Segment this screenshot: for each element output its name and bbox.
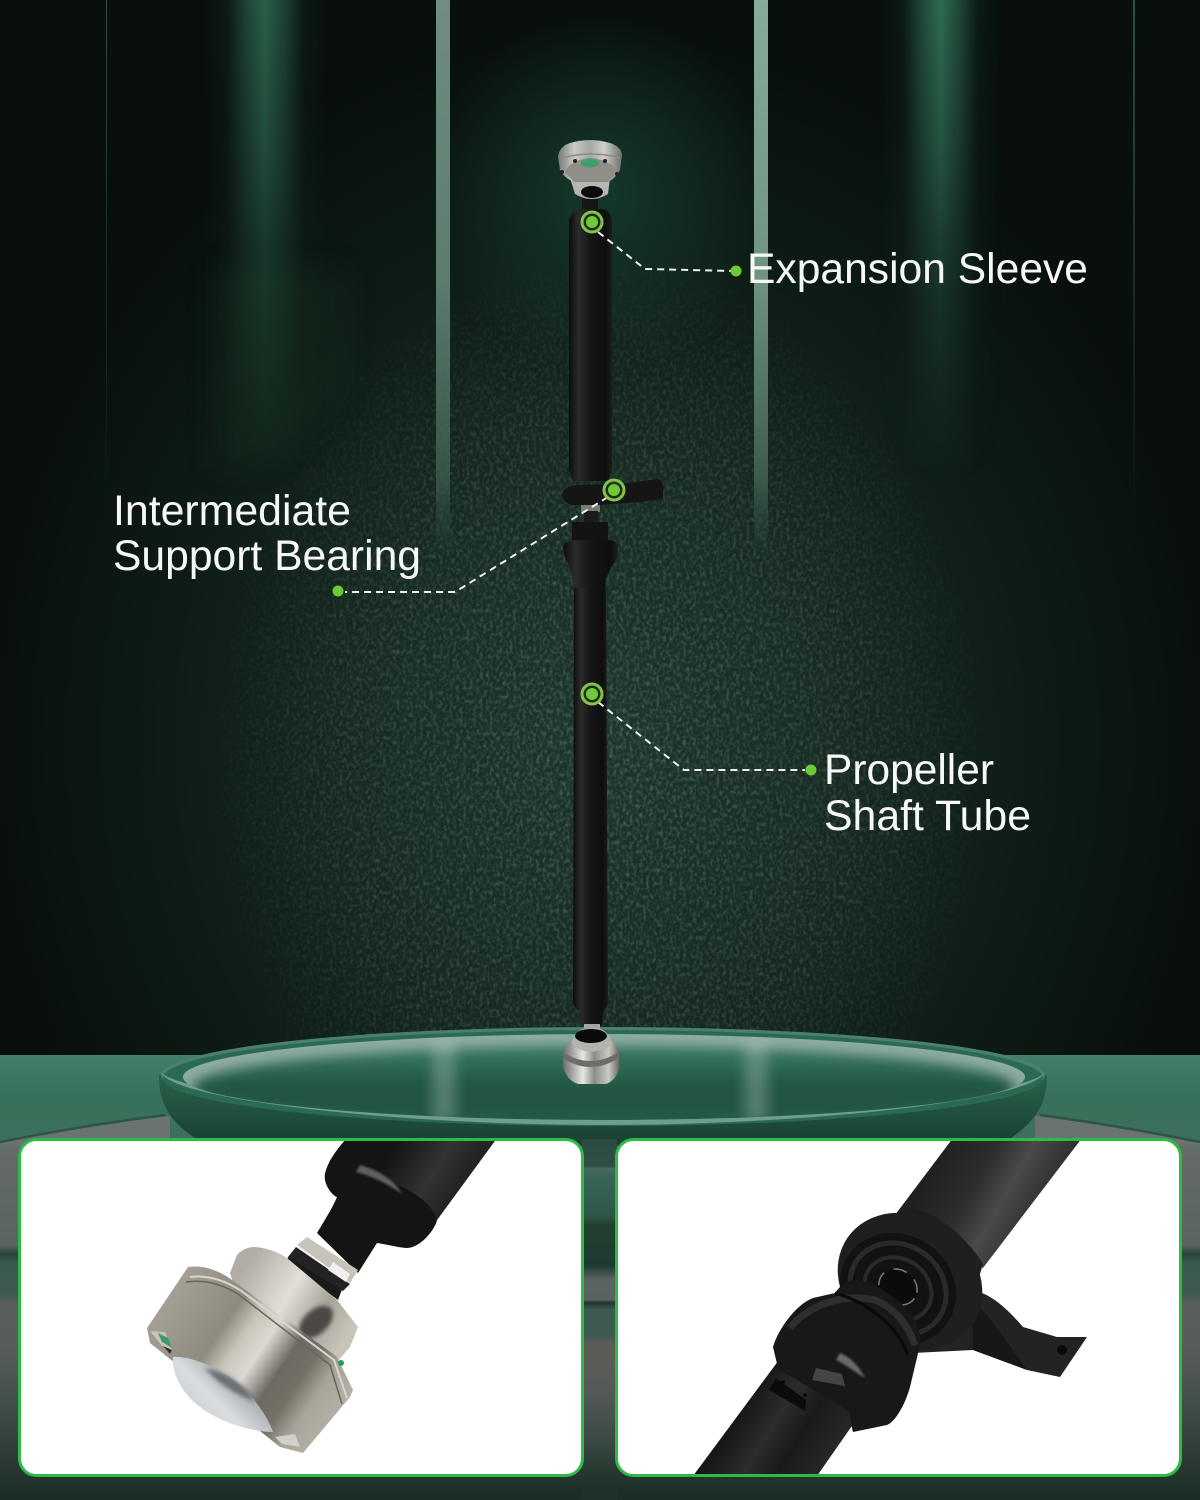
callout: expansion sleeve: Expansion Sleeve	[747, 246, 1088, 293]
callout: propeller shaft tube: Propeller	[824, 747, 994, 794]
callout: expansion sleeve	[582, 212, 1088, 293]
floor and platform	[0, 1027, 1200, 1146]
flange body	[147, 1267, 353, 1453]
platform top face	[183, 1034, 1025, 1120]
lower bell	[773, 1280, 921, 1432]
background: light beams	[106, 0, 1135, 560]
rubber boot and clamp	[287, 1257, 343, 1300]
lower tube	[694, 1362, 852, 1474]
drive shaft main product	[558, 140, 663, 1084]
lower shaft tube	[573, 588, 608, 1026]
upper sleeve tube	[569, 209, 612, 481]
bottom flange joint	[563, 1024, 620, 1084]
callout: propeller shaft tube	[582, 684, 1031, 840]
callout: intermediate support bearing	[113, 480, 624, 596]
background: dark green studio wall	[96, 39, 1104, 1055]
panel: flange joint close-up	[20, 1138, 582, 1476]
bell housing	[230, 1247, 358, 1370]
sleeve and bell	[317, 1138, 497, 1273]
upper tube	[895, 1138, 1082, 1268]
top flange joint	[558, 140, 622, 210]
lower background bands behind panels	[0, 1139, 1200, 1500]
callout: propeller shaft tube: Shaft Tube	[824, 793, 1031, 840]
support bearing	[562, 479, 663, 592]
collar and bearing disk	[900, 1208, 983, 1274]
bracket	[913, 1293, 1087, 1377]
platform side wall	[159, 1075, 1047, 1146]
callout: intermediate support bearing: Intermediate	[113, 488, 351, 535]
platform top rim	[161, 1027, 1045, 1123]
domed cap	[173, 1357, 273, 1432]
panel: support bearing close-up	[616, 1138, 1180, 1476]
callout: intermediate support bearing: Support Bearing	[113, 533, 421, 580]
